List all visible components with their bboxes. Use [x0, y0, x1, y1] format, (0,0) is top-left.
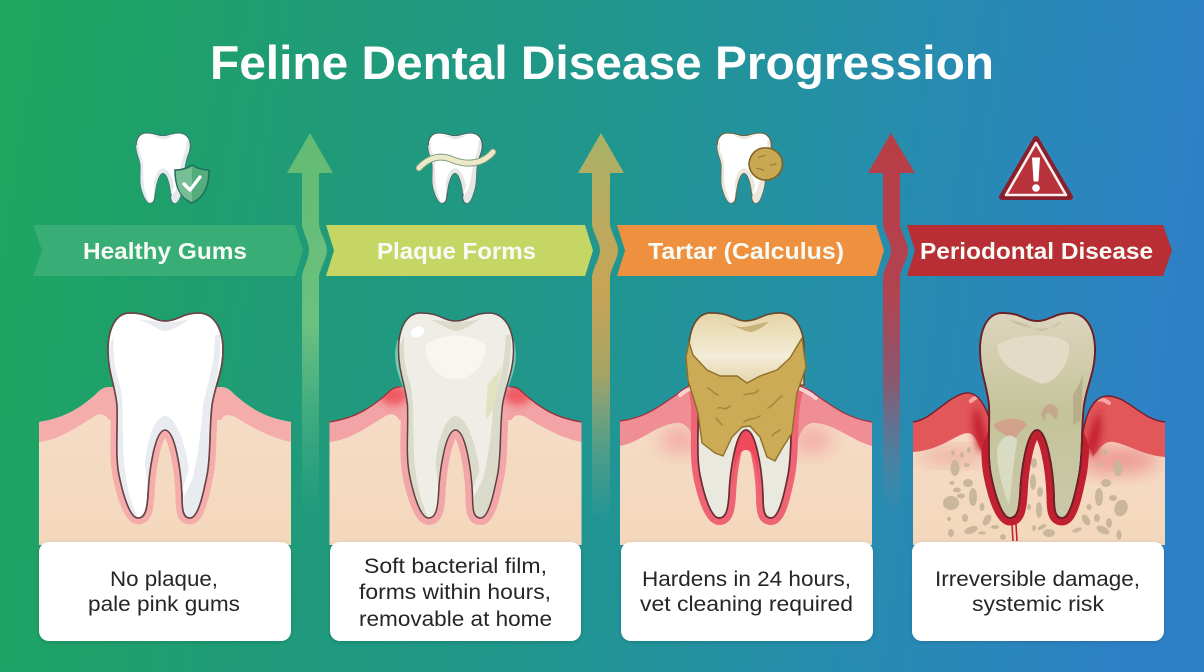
ribbon: plaque forms	[326, 225, 593, 276]
icon: healthy tooth with shield	[136, 133, 209, 203]
panel: plaque tooth diagram	[330, 313, 582, 550]
panel: periodontal tooth diagram	[911, 313, 1167, 550]
plaque film halo	[395, 340, 516, 392]
ribbon: periodontal disease	[907, 225, 1172, 276]
arrow: plaque to tartar	[578, 133, 624, 520]
panel: tartar tooth diagram	[620, 313, 872, 550]
text card: tartar: Hardens in 24 hours,	[642, 567, 851, 591]
arrow: healthy to plaque	[287, 133, 333, 520]
arrow: tartar to periodontal	[868, 133, 915, 520]
red line: root fissure	[1012, 524, 1017, 541]
ribbon: healthy gums: Healthy Gums	[83, 238, 247, 264]
ribbon: tartar	[617, 225, 884, 276]
discoloured tooth	[980, 313, 1095, 518]
icon: warning triangle	[1002, 139, 1070, 197]
text card: plaque forms: Soft bacterial film,	[364, 554, 547, 578]
tartar deposit	[686, 338, 806, 461]
text card: plaque forms	[330, 542, 581, 641]
text card: periodontal disease	[912, 542, 1164, 641]
ribbon: tartar: Tartar (Calculus)	[648, 238, 844, 264]
plaque-coated tooth	[398, 313, 514, 518]
text card: plaque forms: forms within hours,	[359, 580, 551, 604]
text card: tartar: vet cleaning required	[640, 592, 853, 616]
bone loss specks	[943, 447, 1130, 540]
text card: healthy gums: No plaque,	[110, 567, 218, 591]
ribbon: plaque forms: Plaque Forms	[377, 238, 536, 264]
text card: tartar	[621, 542, 873, 641]
text card: periodontal disease: systemic risk	[972, 592, 1104, 616]
healthy tooth	[108, 313, 223, 518]
text card: healthy gums: pale pink gums	[88, 592, 240, 616]
text card: healthy gums	[39, 542, 291, 641]
text card: periodontal disease: Irreversible damage,	[935, 567, 1140, 591]
tooth with exposed roots	[689, 313, 804, 518]
icon: tooth with plaque film	[419, 133, 493, 203]
panel: healthy tooth diagram	[39, 313, 291, 550]
text card: plaque forms: removable at home	[359, 607, 552, 631]
ribbon: healthy gums	[33, 225, 303, 276]
title: Feline Dental Disease Progression	[210, 36, 994, 89]
ribbon: periodontal disease: Periodontal Disease	[920, 238, 1153, 264]
icon: tooth with tartar	[717, 133, 782, 203]
